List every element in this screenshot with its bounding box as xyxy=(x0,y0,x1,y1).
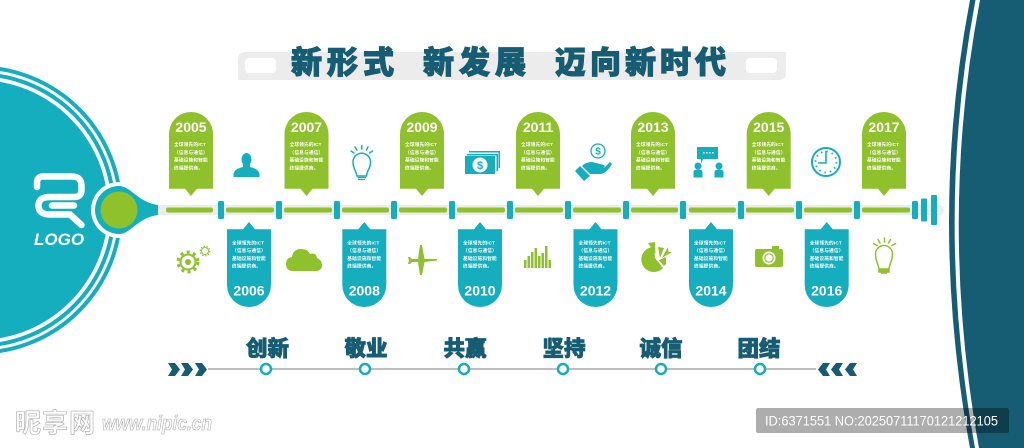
card 2008: 终端提供商。 xyxy=(347,262,376,270)
watermark: 昵享网 xyxy=(15,408,95,438)
card 2009: 终端提供商。 xyxy=(405,164,434,172)
card 2005 xyxy=(169,112,213,196)
card 2011: 2011 xyxy=(523,119,553,135)
card 2015: 终端提供商。 xyxy=(752,164,781,172)
card 2011: 终端提供商。 xyxy=(521,164,550,172)
card 2006: （信息与通信） xyxy=(232,247,266,254)
card 2010: 2010 xyxy=(464,282,496,298)
card 2012: 基础设施和智能 xyxy=(578,255,613,262)
logo mark xyxy=(37,176,82,225)
icon: camera xyxy=(755,246,783,267)
icon: clock xyxy=(812,148,840,176)
icon: banknotes: $ xyxy=(477,160,483,172)
card 2015: （信息与通信） xyxy=(752,149,786,156)
card 2017: （信息与通信） xyxy=(867,149,901,156)
card 2014: 基础设施和智能 xyxy=(694,255,728,262)
watermark: www.nipic.cn xyxy=(102,413,212,435)
card 2008 xyxy=(342,222,386,307)
icon: airplane xyxy=(408,245,437,275)
icon: bar chart xyxy=(524,246,551,268)
timeline bar xyxy=(150,195,944,225)
card 2016: （信息与通信） xyxy=(810,247,844,254)
card 2008: （信息与通信） xyxy=(347,247,381,254)
card 2014: （信息与通信） xyxy=(694,247,728,254)
card 2007: 2007 xyxy=(291,119,322,135)
value labels: 创新 xyxy=(246,336,289,361)
card 2011: 基础设施和智能 xyxy=(521,156,555,164)
card 2009: （信息与通信） xyxy=(405,149,439,156)
left chevrons xyxy=(168,363,207,376)
card 2014 xyxy=(689,222,733,307)
value labels: 团结 xyxy=(737,337,781,361)
right chevrons xyxy=(818,363,857,376)
card 2013: 全球领先的ICT xyxy=(636,141,668,148)
icon: light bulb green xyxy=(874,238,896,273)
card 2014: 2014 xyxy=(695,282,727,298)
card 2010: 基础设施和智能 xyxy=(463,255,497,262)
values axis xyxy=(168,336,857,376)
card 2006: 终端提供商。 xyxy=(232,262,261,270)
card 2012: 2012 xyxy=(580,282,611,298)
card 2012: 终端提供商。 xyxy=(578,262,608,270)
card 2008: 全球领先的ICT xyxy=(347,240,380,246)
card 2011: （信息与通信） xyxy=(521,149,555,156)
watermark xyxy=(15,408,212,438)
card 2006 xyxy=(227,222,271,307)
card 2014: 终端提供商。 xyxy=(694,262,723,270)
icon: gears xyxy=(178,246,210,272)
icon: hand with coin: $ xyxy=(595,146,601,158)
card 2013: 2013 xyxy=(637,119,669,135)
value labels xyxy=(246,336,781,361)
value labels: 坚持 xyxy=(542,337,586,361)
value labels: 共赢 xyxy=(443,336,487,361)
card 2009 xyxy=(400,112,444,196)
timeline start node xyxy=(91,182,158,238)
card 2011 xyxy=(516,112,560,196)
card 2015: 基础设施和智能 xyxy=(752,156,786,164)
image id stamp: ID:6371551 NO:20250711170121212105 xyxy=(765,412,998,428)
card 2006: 全球领先的ICT xyxy=(232,240,264,246)
card 2016: 基础设施和智能 xyxy=(810,255,844,262)
title: 新发展 xyxy=(423,46,526,80)
card 2006: 基础设施和智能 xyxy=(232,255,266,262)
card 2014: 全球领先的ICT xyxy=(694,240,726,246)
card 2007: 终端提供商。 xyxy=(290,164,319,172)
icon: banknotes xyxy=(465,151,500,174)
card 2007: 基础设施和智能 xyxy=(290,156,324,164)
card 2015: 2015 xyxy=(753,119,784,135)
card 2005: （信息与通信） xyxy=(174,149,208,156)
card 2017: 基础设施和智能 xyxy=(867,156,901,164)
card 2010: 全球领先的ICT xyxy=(463,240,495,246)
card 2007: （信息与通信） xyxy=(290,149,323,156)
card 2008: 2008 xyxy=(349,282,380,298)
icon: light bulb teal xyxy=(351,146,372,180)
card 2017: 2017 xyxy=(868,119,900,135)
icon: person xyxy=(234,153,260,177)
card 2008: 基础设施和智能 xyxy=(347,255,381,262)
card 2015: 全球领先的ICT xyxy=(752,141,784,148)
icon: hand with coin xyxy=(575,144,612,181)
card 2017: 终端提供商。 xyxy=(867,164,896,172)
value labels: 诚信 xyxy=(639,336,683,361)
image id stamp xyxy=(756,408,1009,433)
card 2015 xyxy=(747,112,791,196)
card 2017: 全球领先的ICT xyxy=(867,141,899,148)
card 2012: （信息与通信） xyxy=(578,247,612,254)
card 2013: 终端提供商。 xyxy=(636,164,665,172)
icon: chat people xyxy=(694,147,724,178)
card 2016: 全球领先的ICT xyxy=(810,240,842,246)
card 2009: 2009 xyxy=(406,119,438,135)
card 2005: 基础设施和智能 xyxy=(174,156,208,164)
card 2012 xyxy=(574,222,618,307)
card 2017 xyxy=(862,112,906,196)
right side panel xyxy=(949,0,1024,448)
title xyxy=(291,46,726,80)
title: 迈向新时代 xyxy=(555,46,726,80)
title: 新形式 xyxy=(291,46,394,80)
card 2010: （信息与通信） xyxy=(463,247,497,254)
card 2013: 基础设施和智能 xyxy=(636,156,670,164)
card 2007: 全球领先的ICT xyxy=(290,141,322,148)
icon: cloud xyxy=(286,249,322,271)
card 2005: 2005 xyxy=(175,119,207,135)
value labels: 敬业 xyxy=(344,337,388,361)
card 2007 xyxy=(284,112,328,196)
title banner xyxy=(238,46,786,80)
card 2011: 全球领先的ICT xyxy=(521,141,553,148)
card 2005: 全球领先的ICT xyxy=(174,141,206,148)
card 2016: 终端提供商。 xyxy=(810,262,839,270)
left circle logo badge xyxy=(0,67,121,353)
card 2006: 2006 xyxy=(233,282,265,298)
card 2016 xyxy=(805,222,849,307)
card 2013: （信息与通信） xyxy=(636,149,670,156)
card 2012: 全球领先的ICT xyxy=(578,240,611,246)
card 2013 xyxy=(631,112,675,196)
icon: pie chart xyxy=(641,242,672,272)
card 2009: 全球领先的ICT xyxy=(405,141,437,148)
card 2010: 终端提供商。 xyxy=(463,262,492,270)
card 2016: 2016 xyxy=(811,282,842,298)
axis dots xyxy=(261,364,765,374)
card 2010 xyxy=(458,222,502,307)
logo text: LOGO xyxy=(34,230,84,249)
card 2005: 终端提供商。 xyxy=(174,164,203,172)
card 2009: 基础设施和智能 xyxy=(405,156,439,164)
